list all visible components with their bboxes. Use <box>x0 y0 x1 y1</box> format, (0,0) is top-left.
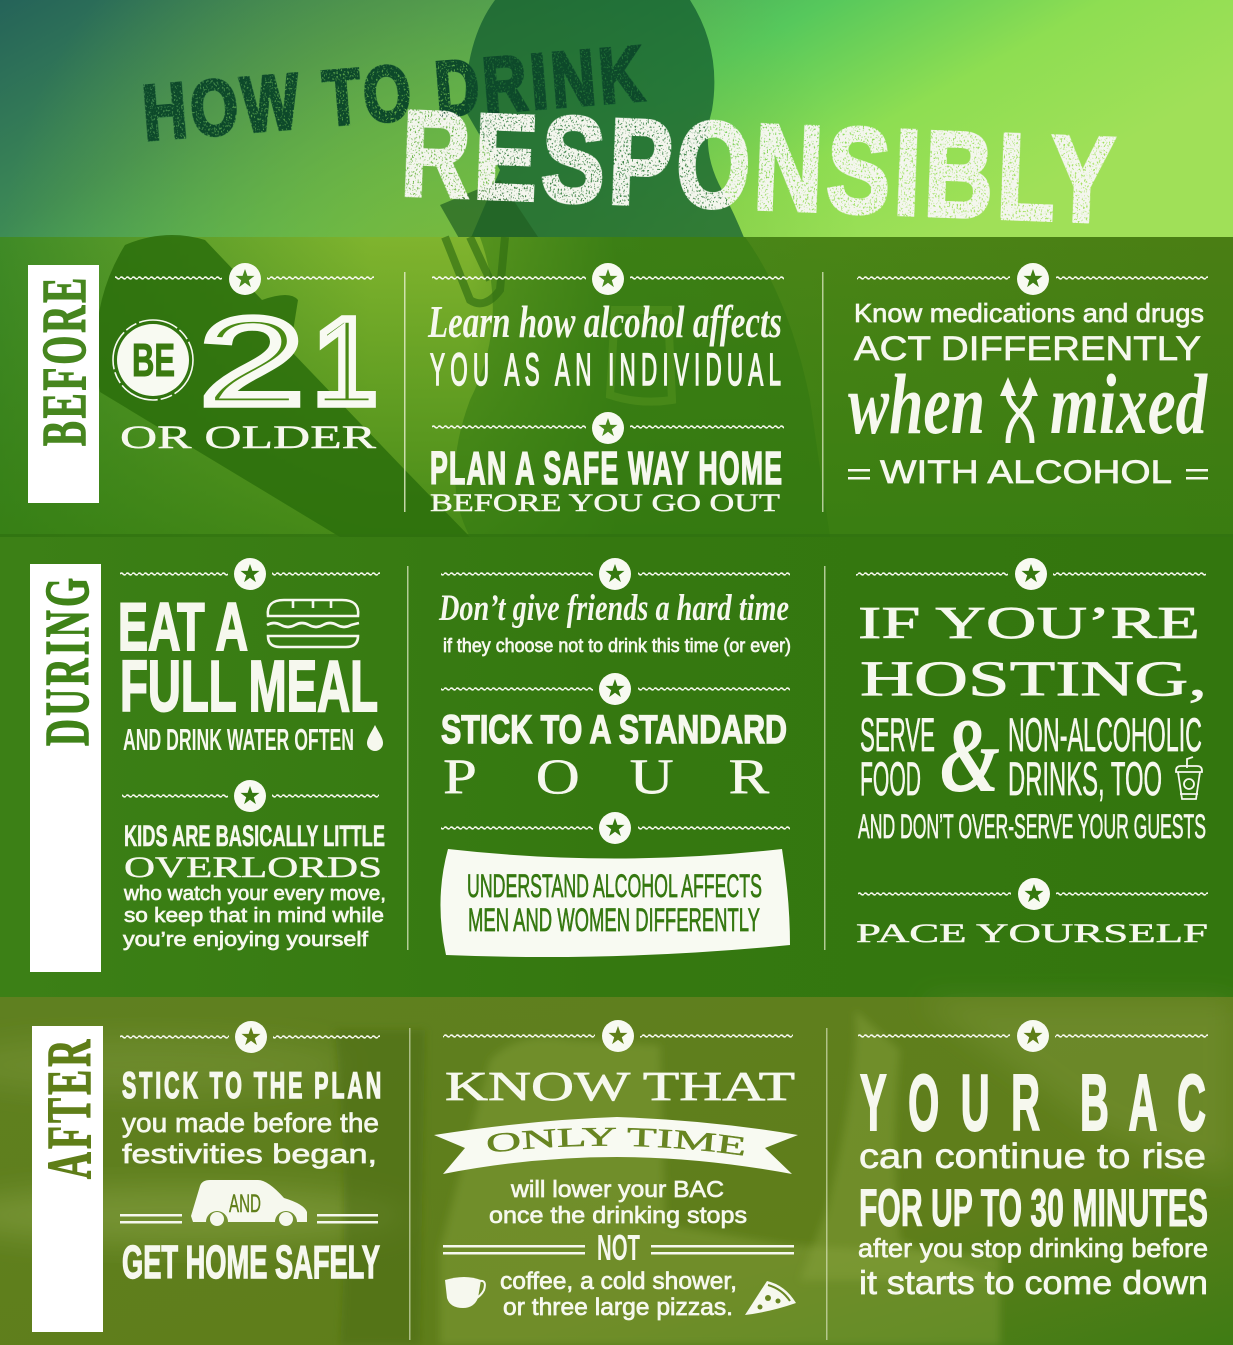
text: or three large pizzas: or three large pizzas. <box>503 1294 733 1321</box>
divider <box>441 673 790 705</box>
text: stick to a standard: STICK TO A STANDARD <box>441 708 787 752</box>
divider <box>432 412 784 444</box>
text: get home safely: GET HOME SAFELY <box>122 1236 380 1288</box>
badge: be 21 or older: OR OLDER <box>120 420 376 456</box>
vertical rule <box>409 1028 410 1340</box>
vertical rule <box>824 566 826 950</box>
divider <box>441 812 790 844</box>
panel: after <box>32 1020 1208 1340</box>
text: who watch your every move: who watch your every move, <box>123 883 386 905</box>
divider <box>120 1021 380 1053</box>
icon: sandwich <box>267 600 359 647</box>
title: responsibly: RESPONSIBLY <box>399 86 1117 249</box>
text: pace yourself: PACE YOURSELF <box>856 919 1208 948</box>
panel: during: SERVE <box>860 708 935 761</box>
text: with alcohol: WITH ALCOHOL <box>880 454 1172 490</box>
text: act differently: ACT DIFFERENTLY <box>854 330 1201 368</box>
icon: crossing arrows <box>1000 377 1038 443</box>
text: overlords: OVERLORDS <box>124 851 382 884</box>
text: hosting: HOSTING, <box>860 650 1207 706</box>
icon: car with and: AND <box>229 1190 261 1218</box>
vertical rule <box>407 566 408 950</box>
ribbon: only time: ONLY TIME <box>488 1128 744 1156</box>
tab: before <box>28 265 100 503</box>
text: once the drinking stops: once the drinking stops <box>489 1202 747 1228</box>
icon: water drop <box>367 725 383 751</box>
tab: during: DURING <box>33 578 103 746</box>
icon: soda cup <box>1176 757 1202 799</box>
divider <box>432 263 784 295</box>
text: don't give friends a hard time: Don’t give friends a hard time <box>438 588 789 629</box>
band: after background <box>0 997 1233 1345</box>
text: before you go out: BEFORE YOU GO OUT <box>430 490 780 517</box>
text: festivities began: festivities began, <box>122 1139 377 1169</box>
ribbon: only time <box>434 1117 798 1174</box>
text: after you stop drinking before: after you stop drinking before <box>858 1233 1208 1263</box>
text: know that: KNOW THAT <box>445 1063 795 1109</box>
icon: car with and <box>120 1180 378 1226</box>
divider <box>857 263 1208 295</box>
text: and drink water often: AND DRINK WATER OFTEN <box>123 722 354 757</box>
tab: after: AFTER <box>35 1039 105 1179</box>
divider <box>856 558 1206 590</box>
vertical rule <box>822 272 824 512</box>
band: during background <box>0 537 1233 997</box>
text: your bac <box>860 1059 1206 1148</box>
text: stick to the plan: STICK TO THE PLAN <box>122 1066 381 1107</box>
text: you as an individual: YOU AS AN INDIVIDUAL <box>430 345 781 395</box>
text: you're enjoying yourself: you’re enjoying yourself <box>123 929 369 951</box>
badge: be 21 or older: 1 <box>312 294 378 431</box>
divider <box>858 1020 1208 1052</box>
text: coffee, a cold shower: coffee, a cold shower, <box>500 1268 737 1295</box>
text: when: when <box>848 356 985 452</box>
text: kids are basically little: KIDS ARE BASICALLY LITTLE <box>124 820 385 853</box>
text: can continue to rise: can continue to rise <box>859 1137 1206 1176</box>
text: if they choose not to drink: if they choose not to drink this time (or ever) <box>443 636 791 657</box>
divider <box>443 1020 793 1052</box>
text: ampersand: & <box>940 697 1000 814</box>
background: header gradient <box>0 0 1233 240</box>
divider <box>122 780 379 812</box>
text: if you're: IF YOU’RE <box>858 597 1200 648</box>
text: you made before the: you made before the <box>122 1108 379 1138</box>
vertical rule <box>404 272 406 512</box>
panel: before <box>28 263 1208 517</box>
badge: understand alcohol affects: MEN AND WOMEN DIFFERENTLY <box>468 902 760 938</box>
text: full meal: FULL MEAL <box>120 647 378 727</box>
divider <box>441 558 790 590</box>
vertical rule <box>826 1028 828 1340</box>
text: it starts to come down: it starts to come down <box>859 1264 1208 1301</box>
panel: during <box>30 558 1208 972</box>
text: eat a: EAT A <box>118 589 248 665</box>
divider <box>120 558 380 590</box>
text: so keep that in mind while: so keep that in mind while <box>124 905 384 927</box>
badge: be 21 or older <box>113 294 378 456</box>
badge: understand alcohol affects <box>440 849 790 957</box>
icon: pizza slice <box>745 1281 796 1315</box>
text: will lower your bac: will lower your BAC <box>510 1176 724 1202</box>
text: your bac: YOUR <box>860 1059 1040 1148</box>
tab: before: BEFORE <box>30 278 100 446</box>
text: plan a safe way home: PLAN A SAFE WAY HOME <box>430 442 782 494</box>
title: how to drink: HOW TO DRINK <box>139 30 646 157</box>
tab: after <box>32 1026 105 1332</box>
icon: coffee cup <box>445 1277 485 1308</box>
band: before background <box>0 235 1233 537</box>
text: pour: POUR <box>443 749 770 805</box>
badge: be 21 or older: BE <box>132 334 175 386</box>
text: learn how alcohol affects: Learn how alcohol affects <box>427 296 782 347</box>
text: know medications and drugs: Know medications and drugs <box>854 298 1204 328</box>
tab: during <box>30 564 103 972</box>
text: your bac: BAC <box>1080 1059 1206 1148</box>
badge: understand alcohol affects: UNDERSTAND ALCOHOL AFFECTS <box>467 868 762 904</box>
panel: during: FOOD <box>860 752 921 805</box>
text: not: NOT <box>597 1227 640 1268</box>
divider <box>858 878 1208 910</box>
badge: be 21 or older: 2 <box>200 294 304 431</box>
divider <box>115 263 374 295</box>
